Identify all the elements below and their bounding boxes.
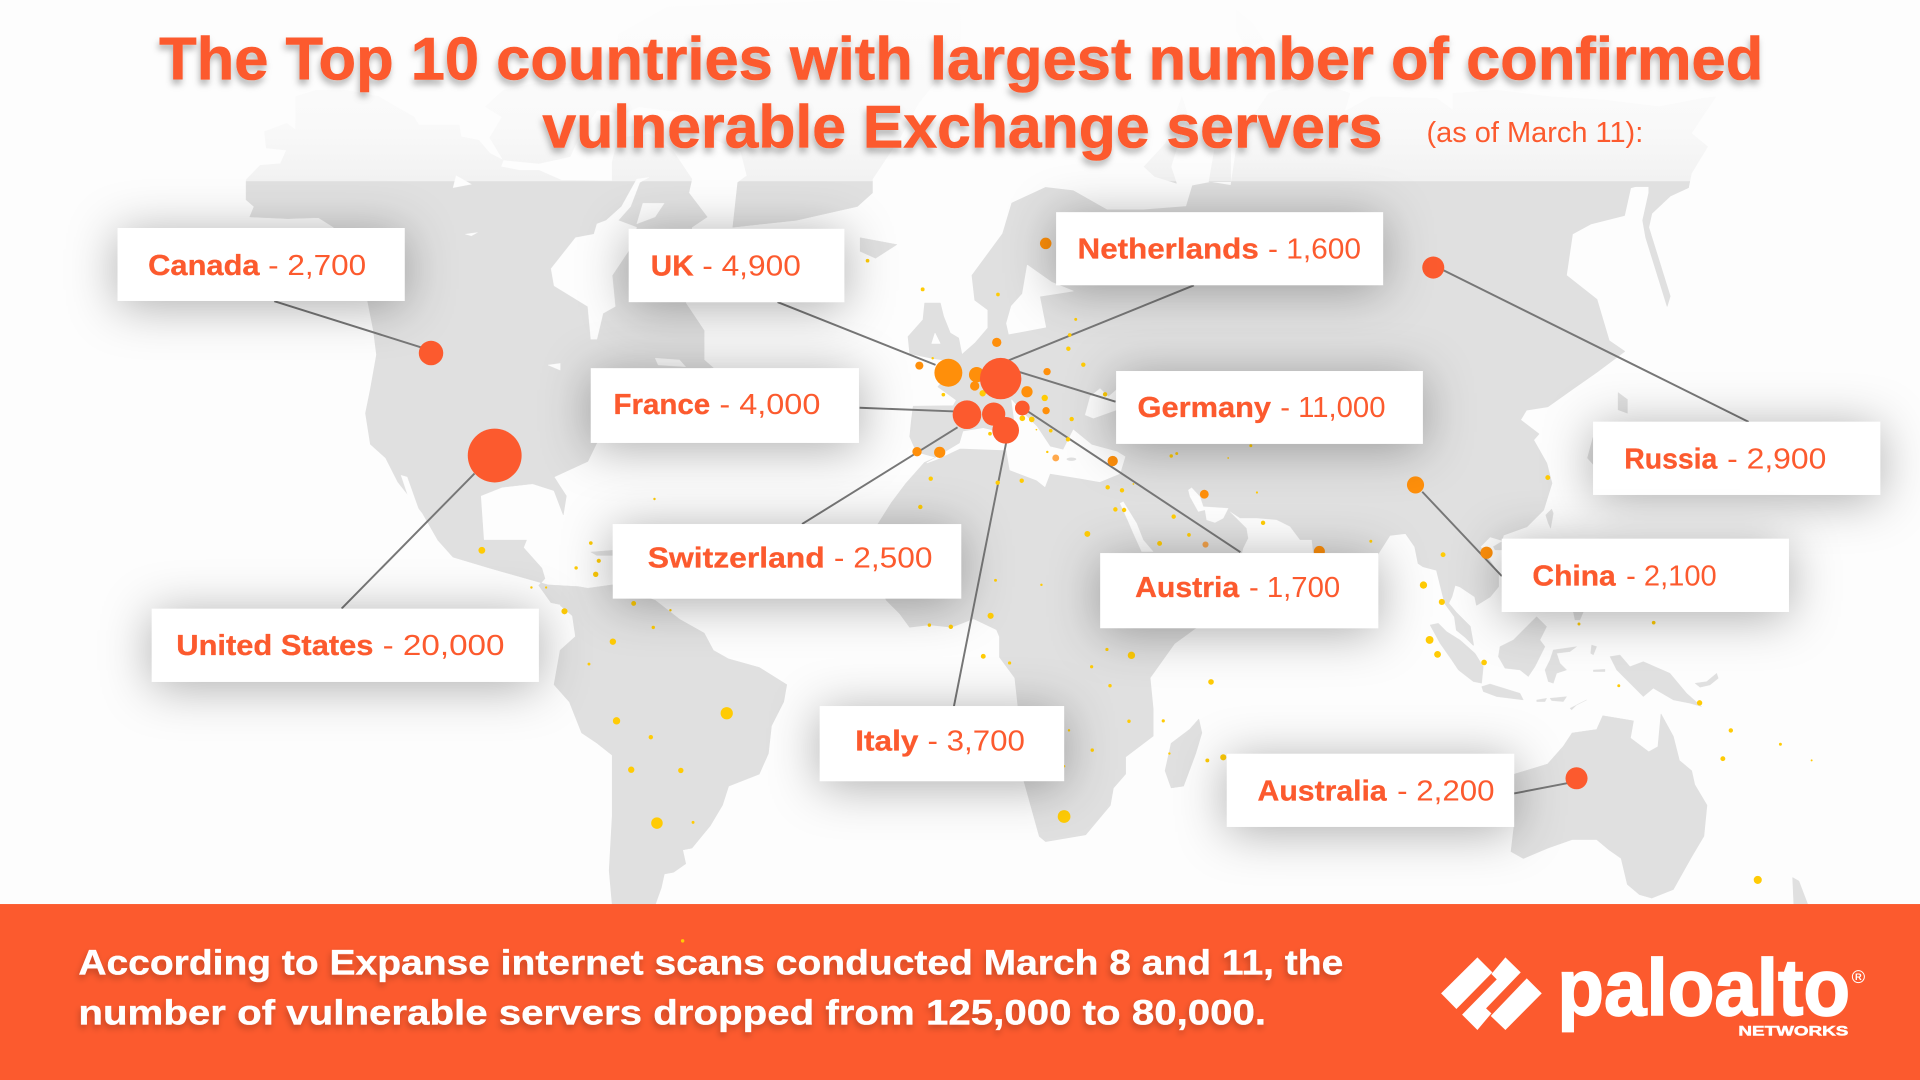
landmass: South America [554,550,787,905]
sea: English Channel inlet [932,333,940,343]
registered mark: R [1855,972,1862,982]
label: Germany: Germany [1138,392,1271,424]
landmass: North America [246,0,960,607]
label: UK [629,229,844,302]
label: Switzerland: - 2,500 [834,543,932,575]
title: The Top 10 countries with largest number of confirmed [159,26,1763,93]
island: Cyprus [1067,457,1076,461]
label: Australia [1227,754,1514,827]
label: China: - 2,100 [1626,560,1717,592]
label: UK: UK [651,251,694,283]
label: Austria [1100,553,1378,628]
landmass: Kamchatka and Russian Far East [1588,181,1689,465]
label: Switzerland [613,524,961,599]
logo subtitle: NETWORKS [1738,1022,1848,1038]
connector lines [274,270,1749,793]
banner text [78,943,1343,1032]
landmass: Southeast Asia islands [1430,509,1718,710]
label: United States [152,609,539,682]
label: Russia: Russia [1624,443,1718,475]
landmass: Russian Arctic, light [1144,10,1716,187]
sea: Baltic [1007,265,1073,334]
label: Italy: Italy [855,726,918,758]
logo: Palo Alto Networks [1441,943,1864,1038]
logo wordmark: paloalto [1557,943,1850,1032]
label: China: China [1532,560,1617,592]
sea: Hudson Bay and Canadian inlets [401,176,686,520]
footer banner [0,904,1920,1080]
label: France: - 4,000 [719,389,820,421]
sea: Red Sea, Persian Gulf, Arabian Sea [1120,488,1313,555]
label: Canada: Canada [148,250,261,282]
label: Italy: - 3,700 [928,726,1025,758]
registered mark [1852,971,1864,983]
label: UK: - 4,900 [702,251,801,283]
landmass: Afro-Eurasia [877,181,1649,841]
label: Australia: - 2,200 [1397,775,1494,807]
label: Austria: - 1,700 [1249,572,1340,604]
small yellow data points [478,259,1813,884]
landmass: Australia, Madagascar, New Zealand [1165,714,1808,905]
label: Switzerland: Switzerland [648,543,825,575]
label: Netherlands [1056,212,1383,285]
label: Germany: - 11,000 [1280,392,1386,424]
title [159,26,1763,160]
label: Australia: Australia [1258,775,1388,807]
label: Netherlands: - 1,600 [1268,233,1361,265]
title: (as of March 11): [1427,117,1643,149]
label: Canada: - 2,700 [268,250,366,282]
title: vulnerable Exchange servers [542,93,1382,160]
medium orange data points [912,238,1493,559]
label: France: France [613,389,710,421]
label: United States: - 20,000 [383,630,504,662]
top-10 country markers [419,257,1588,789]
label: Russia [1593,422,1880,495]
label: United States: United States [176,630,373,662]
label: China [1502,539,1789,612]
label: Netherlands: Netherlands [1078,233,1259,265]
logo mark [1441,957,1542,1030]
banner text: number of vulnerable servers dropped from 125,000 to 80,000. [78,992,1266,1032]
sea: Black Sea [1085,388,1117,418]
label: Austria: Austria [1135,572,1240,604]
sea: Mediterranean [927,400,1125,487]
label: Italy [820,706,1064,781]
label: Russia: - 2,900 [1727,443,1826,475]
label: France [591,368,859,443]
fade over the arctic map area [0,0,1920,181]
label: Germany [1116,371,1423,444]
banner text: According to Expanse internet scans conducted March 8 and 11, the [78,943,1343,983]
label: Canada [118,228,405,301]
